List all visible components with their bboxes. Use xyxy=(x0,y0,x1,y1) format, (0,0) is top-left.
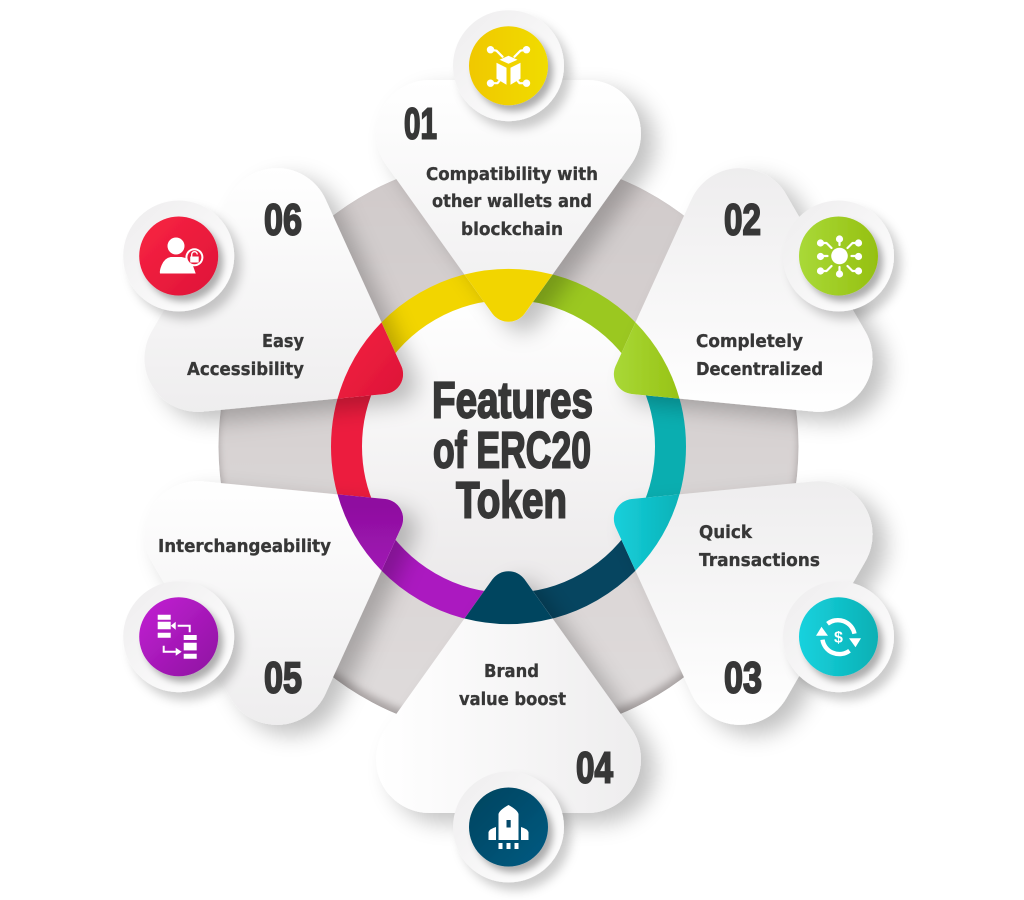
icon: user with lock xyxy=(123,200,234,312)
panel 01 shape xyxy=(376,80,641,322)
infographic: features of ERC20 token xyxy=(123,10,906,895)
text: easy accessibility: Accessibility xyxy=(187,360,305,380)
text: decentralized xyxy=(696,332,823,380)
text: decentralized: Completely xyxy=(696,332,804,352)
centre disc xyxy=(358,296,658,596)
text: brand value boost xyxy=(459,662,566,710)
text: easy accessibility: Easy xyxy=(262,332,305,352)
panel 04 xyxy=(376,571,641,882)
text: compatibility: Compatibility with xyxy=(426,165,598,185)
grey background ring xyxy=(218,150,798,736)
text: quick transactions xyxy=(699,523,820,571)
text: quick transactions: Quick xyxy=(699,523,752,543)
panel 04 shape xyxy=(376,571,641,813)
icon: blockchain cube xyxy=(453,10,564,121)
text: decentralized: Decentralized xyxy=(696,360,823,380)
panel 02 xyxy=(550,149,894,499)
text: easy accessibility xyxy=(187,332,305,380)
title: of ERC20 xyxy=(433,422,591,478)
icon: network hub xyxy=(783,200,894,312)
icon: data swap xyxy=(123,581,234,692)
text: compatibility xyxy=(426,165,598,240)
number 06: 06 xyxy=(264,196,302,244)
number 02: 02 xyxy=(724,196,761,244)
panel 05 shape xyxy=(125,394,467,744)
ring band segments xyxy=(298,244,719,649)
title: Features xyxy=(432,372,593,428)
panel 03 shape xyxy=(550,394,892,744)
panel 03 xyxy=(550,394,894,744)
text: brand value boost: value boost xyxy=(459,690,566,710)
panel 06 shape xyxy=(125,149,467,499)
title: Token xyxy=(456,472,567,528)
title xyxy=(432,372,593,528)
text: interchangeability: Interchangeability xyxy=(158,537,332,557)
text: compatibility: other wallets and xyxy=(432,192,592,212)
number 03: 03 xyxy=(724,654,762,702)
panel 05 xyxy=(123,394,467,744)
number 04: 04 xyxy=(576,744,613,792)
number 05: 05 xyxy=(264,654,302,702)
icon: dollar exchange xyxy=(783,581,894,692)
text: brand value boost: Brand xyxy=(484,662,539,682)
panel 01 xyxy=(376,10,641,322)
number 01: 01 xyxy=(404,100,437,148)
icon: dollar exchange: $ xyxy=(834,630,843,647)
text: compatibility: blockchain xyxy=(461,220,563,240)
panel 06 xyxy=(123,149,467,499)
icon: rocket xyxy=(453,772,564,882)
panel 02 shape xyxy=(550,149,892,499)
text: quick transactions: Transactions xyxy=(699,551,820,571)
